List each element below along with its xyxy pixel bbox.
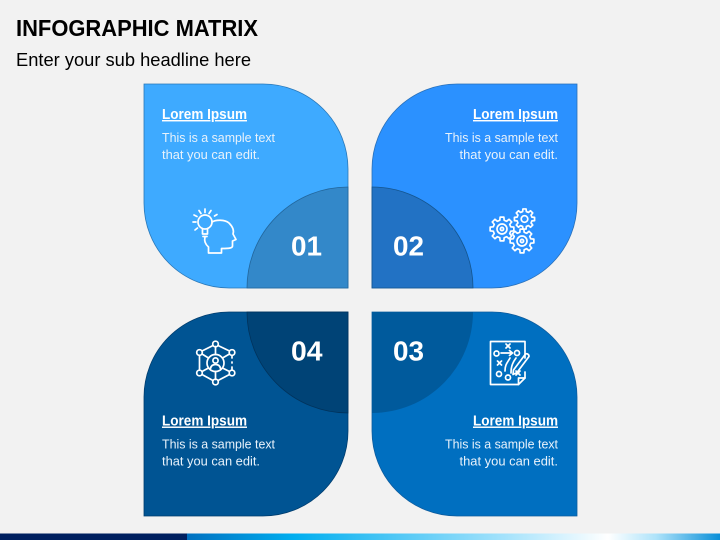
panel 04 xyxy=(144,312,348,516)
icon: network with person xyxy=(197,341,235,385)
number quadrant 03 xyxy=(372,312,473,413)
icon: gears xyxy=(490,209,535,253)
body text 01 xyxy=(162,130,275,162)
heading 02: Lorem Ipsum xyxy=(473,107,558,123)
petal shape 04 xyxy=(144,312,348,516)
body text 03: This is a sample text xyxy=(445,436,558,452)
body text 03: that you can edit. xyxy=(460,454,558,468)
petal shape 02 xyxy=(372,84,577,288)
panel 01 xyxy=(144,84,348,288)
body text 01: that you can edit. xyxy=(162,147,260,162)
icon: strategy playbook xyxy=(490,342,529,384)
petal shape 01 xyxy=(144,84,348,288)
body text 04 xyxy=(162,436,275,468)
body text 02: This is a sample text xyxy=(445,130,558,145)
footer bar xyxy=(0,534,720,540)
number quadrant 02 xyxy=(372,187,473,288)
number quadrant 04 xyxy=(247,312,348,413)
body text 01: This is a sample text xyxy=(162,130,275,145)
body text 02 xyxy=(445,130,558,162)
number 02: 02 xyxy=(393,230,424,262)
body text 04: This is a sample text xyxy=(162,436,275,452)
heading 04: Lorem Ipsum xyxy=(162,414,247,430)
number 03: 03 xyxy=(393,336,424,366)
body text 02: that you can edit. xyxy=(460,147,558,162)
heading 01: Lorem Ipsum xyxy=(162,107,247,123)
panel 03 xyxy=(372,312,577,516)
number 01: 01 xyxy=(291,230,322,262)
title: INFOGRAPHIC MATRIX xyxy=(16,15,259,41)
body text 04: that you can edit. xyxy=(162,454,260,468)
panel 02 xyxy=(372,84,577,288)
icon: head with lightbulb xyxy=(193,209,236,253)
subtitle: Enter your sub headline here xyxy=(16,50,251,70)
heading 03: Lorem Ipsum xyxy=(473,414,558,430)
body text 03 xyxy=(445,436,558,468)
number 04: 04 xyxy=(291,336,323,366)
number quadrant 01 xyxy=(247,187,348,288)
petal shape 03 xyxy=(372,312,577,516)
